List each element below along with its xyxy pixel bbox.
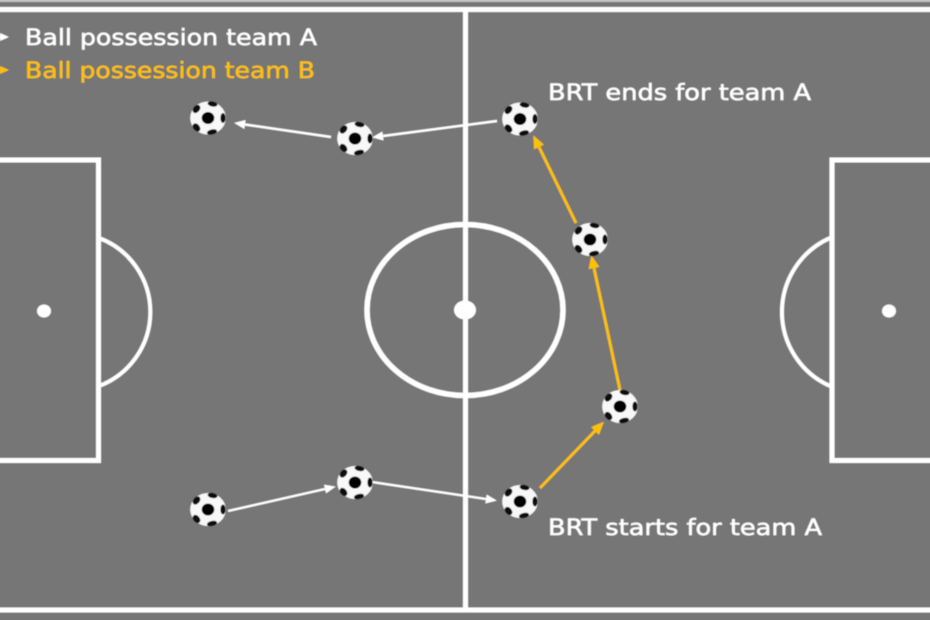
- ball 1: [190, 100, 226, 136]
- legend: [0, 26, 317, 84]
- ball 3: [502, 101, 538, 137]
- legend label: team A: Ball possession team A: [25, 26, 317, 51]
- legend arrow: team A: [0, 33, 9, 41]
- ball 8: [190, 492, 226, 527]
- ball 2: [337, 121, 373, 156]
- ball 7: [337, 465, 373, 500]
- ball 5: [602, 389, 638, 424]
- arrows: team B passes: [539, 147, 620, 488]
- ball 4: [572, 222, 608, 257]
- legend label: team B: Ball possession team B: [25, 59, 315, 84]
- label: BRT starts: BRT starts for team A: [548, 516, 822, 541]
- legend arrow: team B: [0, 66, 9, 74]
- ball 6: [502, 484, 538, 519]
- label: BRT ends: BRT ends for team A: [548, 81, 811, 106]
- centre and penalty spots: [37, 300, 896, 320]
- arrows: team A passes: [228, 121, 497, 511]
- top edge strip: [0, 0, 930, 2]
- football markers: [190, 100, 638, 527]
